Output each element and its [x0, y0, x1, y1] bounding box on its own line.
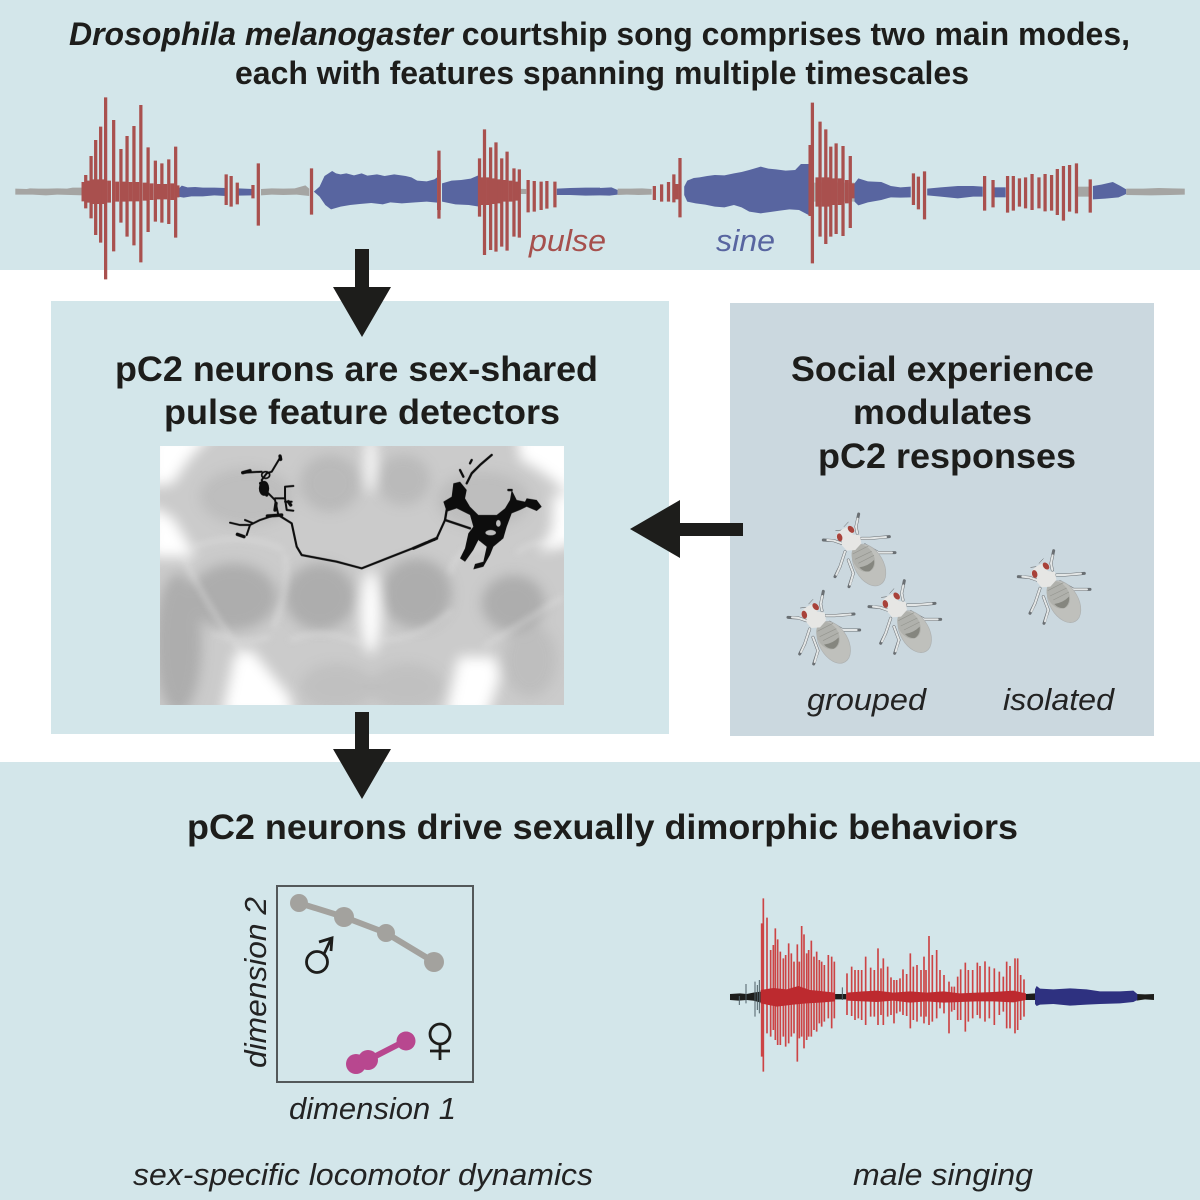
caption: locomotor dynamics: sex-specific locomotor dynamics [133, 1157, 593, 1192]
heading: social experience: modulates [853, 393, 1032, 432]
heading: social experience: pC2 responses [818, 437, 1076, 476]
arrow: song to pC2 [333, 249, 391, 337]
chart: locomotor dynamics plot [277, 886, 473, 1082]
neuron tracing [230, 455, 542, 569]
icon: isolated fly [1018, 551, 1090, 628]
title [69, 16, 1130, 91]
icon: grouped flies [788, 514, 941, 669]
caption: male singing: male singing [853, 1157, 1033, 1192]
icon: male symbol [306, 938, 332, 972]
arrow: pC2 to behaviors [333, 712, 391, 799]
panel: social experience [730, 303, 1154, 736]
image: pC2 neuron in brain [160, 446, 564, 705]
title: each with features spanning multiple timescales [235, 55, 969, 91]
panel: top song background [0, 0, 1200, 270]
panel: pC2 feature detectors [51, 301, 669, 734]
arrow: social experience to pC2 [630, 500, 743, 558]
heading: pC2 feature detectors: pC2 neurons are sex-shared [115, 350, 598, 389]
heading: social experience: Social experience [791, 350, 1094, 389]
label: sine: sine [716, 223, 775, 258]
chart: courtship song waveform [15, 97, 1185, 279]
heading: pC2 feature detectors [115, 350, 598, 432]
axis label: dimension 1: dimension 1 [289, 1091, 456, 1126]
heading: social experience [791, 350, 1094, 476]
axis label: dimension 2: dimension 2 [238, 897, 273, 1068]
heading: behaviors: pC2 neurons drive sexually dimorphic behaviors [187, 808, 1018, 847]
label: grouped: grouped [807, 682, 928, 717]
chart: male singing waveform [730, 898, 1154, 1072]
label: pulse: pulse [528, 223, 606, 258]
heading: pC2 feature detectors: pulse feature detectors [164, 393, 560, 432]
icon: female symbol [430, 1024, 450, 1060]
label: isolated: isolated [1003, 682, 1116, 717]
series: female [346, 1032, 416, 1074]
panel: behaviors [0, 762, 1200, 1200]
series: male [290, 894, 444, 972]
title: Drosophila melanogaster courtship song comprises two main modes, [69, 16, 1130, 52]
